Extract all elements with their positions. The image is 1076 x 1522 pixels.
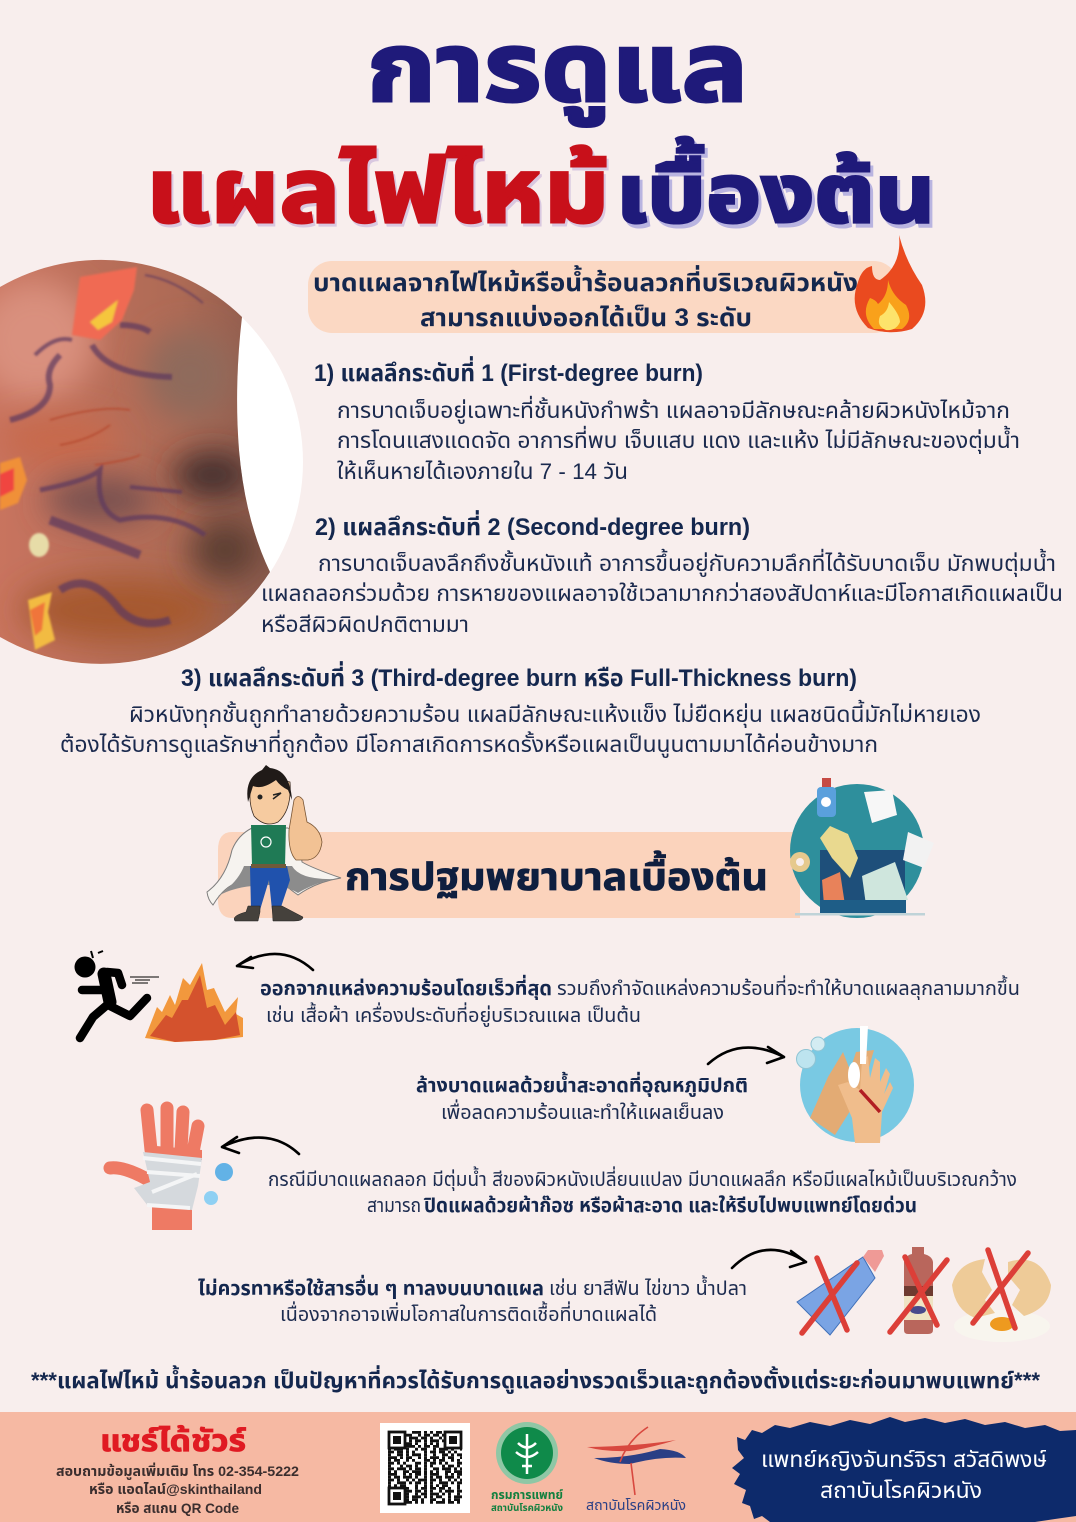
section 1: first-degree burn: ให้เห็นหายได้เองภายใน 7 - 14 วัน — [337, 459, 628, 484]
step 3 text: กรณีมีบาดแผลถลอก มีตุ่มน้ำ สีของผิวหนังเปลี่ยนแปลง มีบาดแผลลึก หรือมีแผลไหม้เป็นบริเวณกว้าง — [268, 1166, 1017, 1191]
step 1 text: เช่น เสื้อผ้า เครื่องประดับที่อยู่บริเวณแผล เป็นต้น — [266, 1002, 641, 1028]
icon: broken egg crossed out — [952, 1250, 1051, 1342]
footer: contact: แชร์ได้ชัวร์ — [100, 1425, 246, 1458]
footer band — [0, 1412, 1076, 1522]
icon: bandaged hand — [110, 1108, 233, 1230]
footer: contact: หรือ แอดไลน์@skinthailand — [89, 1481, 262, 1497]
icon: person running from fire — [74, 951, 159, 1038]
arrow: to washing — [708, 1047, 784, 1064]
arrow: to hand — [222, 1137, 299, 1154]
section 2: second-degree burn: หรือสีผิวผิดปกติตามมา — [261, 612, 469, 637]
step 2 text: เพื่อลดความร้อนและทำให้แผลเย็นลง — [441, 1099, 724, 1124]
step 1 text — [260, 974, 1020, 1028]
title line 2: เบื้องต้น — [616, 136, 935, 240]
logo: Department of Medical Services: กรมการแพทย์ — [491, 1488, 563, 1502]
arrow: to forbidden items — [732, 1250, 806, 1268]
title line 2 — [146, 136, 938, 245]
section 2: second-degree burn: การบาดเจ็บลงลึกถึงชั้นหนังแท้ อาการขึ้นอยู่กับความลึกที่ได้รับบาดเจ็บ มักพบตุ่มน้ำ — [318, 548, 1056, 577]
step 1 text: ออกจากแหล่งความร้อนโดยเร็วที่สุด — [260, 974, 552, 1000]
step 3 text: สามารถ — [367, 1195, 421, 1217]
subtitle pill: บาดแผลจากไฟไหม้หรือน้ำร้อนลวกที่บริเวณผิวหนัง — [313, 265, 858, 297]
subtitle pill — [308, 261, 898, 333]
title line 2: แผลไฟไหม้ — [146, 142, 609, 242]
section 2: second-degree burn: แผลถลอกร่วมด้วย การหายของแผลอาจใช้เวลามากกว่าสองสัปดาห์และมีโอกาสเกิดแผลเป็น — [261, 581, 1063, 606]
first aid banner — [218, 832, 800, 918]
icon: doctor mascot — [207, 765, 341, 921]
doctor name on navy brush: สถาบันโรคผิวหนัง — [820, 1478, 982, 1503]
step 4 text: เนื่องจากอาจเพิ่มโอกาสในการติดเชื้อที่บาดแผลได้ — [280, 1301, 657, 1326]
doctor name on navy brush — [732, 1417, 1076, 1522]
footer: contact: หรือ สแกน QR Code — [116, 1500, 239, 1516]
section 2: second-degree burn: 2) แผลลึกระดับที่ 2 (Second-degree burn) — [315, 510, 750, 541]
section 3: third-degree burn — [60, 661, 981, 758]
logo: Department of Medical Services — [491, 1422, 564, 1514]
doctor name on navy brush: แพทย์หญิงจันทร์จิรา สวัสดิพงษ์ — [761, 1447, 1047, 1472]
title line 2: เบื้องต้น — [619, 140, 938, 244]
section 1: first-degree burn: การบาดเจ็บอยู่เฉพาะที่ชั้นหนังกำพร้า แผลอาจมีลักษณะคล้ายผิวหนังไหม้จาก — [337, 395, 1010, 424]
icon: washing hands — [796, 1026, 914, 1143]
step 3 text: ปิดแผลด้วยผ้าก๊อซ หรือผ้าสะอาด และให้รีบไปพบแพทย์โดยด่วน — [423, 1195, 917, 1217]
step 2 text — [416, 1071, 748, 1124]
logo: Institute of Dermatology — [586, 1427, 686, 1513]
QR code — [380, 1423, 470, 1513]
footer: contact: สอบถามข้อมูลเพิ่มเติม โทร 02-354-5222 — [56, 1462, 299, 1481]
icon: fish sauce bottle crossed out — [890, 1247, 947, 1334]
icon: toothpaste crossed out — [797, 1250, 884, 1335]
logo: Institute of Dermatology: สถาบันโรคผิวหนัง — [586, 1497, 686, 1513]
subtitle pill: สามารถแบ่งออกได้เป็น 3 ระดับ — [420, 304, 752, 332]
section 3: third-degree burn: ต้องได้รับการดูแลรักษาที่ถูกต้อง มีโอกาสเกิดการหดรั้งหรือแผลเป็นนูนตามมาได้ค่อนข้างมาก — [60, 729, 878, 758]
section 3: third-degree burn: ผิวหนังทุกชั้นถูกทำลายด้วยความร้อน แผลมีลักษณะแห้งแข็ง ไม่ยืดหยุ่น แผลชนิดนี้มักไม่หายเอง — [129, 699, 981, 728]
section 2: second-degree burn — [261, 510, 1063, 637]
icon: first aid kit — [790, 778, 934, 918]
arrow: to fire — [237, 954, 313, 970]
logo: Department of Medical Services: สถาบันโรคผิวหนัง — [491, 1503, 564, 1514]
title line 1: การดูแล — [367, 15, 748, 126]
step 2 text: ล้างบาดแผลด้วยน้ำสะอาดที่อุณหภูมิปกติ — [416, 1071, 748, 1097]
step 4 text — [198, 1274, 747, 1326]
section 1: first-degree burn: การโดนแสงแดดจัด อาการที่พบ เจ็บแสบ แดง และแห้ง ไม่มีลักษณะของตุ่มน้ำ — [337, 425, 1020, 454]
step 4 text: ไม่ควรทาหรือใช้สารอื่น ๆ ทาลงบนบาดแผล — [198, 1274, 544, 1300]
icon: flame — [855, 235, 925, 332]
section 1: first-degree burn: 1) แผลลึกระดับที่ 1 (First-degree burn) — [314, 356, 703, 387]
footer: contact — [56, 1425, 299, 1516]
section 3: third-degree burn: 3) แผลลึกระดับที่ 3 (Third-degree burn หรือ Full-Thickness burn) — [181, 661, 857, 692]
icon: fire — [145, 963, 243, 1042]
step 1 text: รวมถึงกำจัดแหล่งความร้อนที่จะทำให้บาดแผลลุกลามมากขึ้น — [557, 975, 1020, 1000]
first aid banner: การปฐมพยาบาลเบื้องต้น — [345, 850, 768, 899]
burn wound photo — [0, 250, 305, 670]
title line 2: แผลไฟไหม้ — [148, 145, 611, 245]
section 1: first-degree burn — [314, 356, 1020, 484]
step 3 text — [268, 1166, 1017, 1217]
warning note: ***แผลไฟไหม้ น้ำร้อนลวก เป็นปัญหาที่ควรได้รับการดูแลอย่างรวดเร็วและถูกต้องตั้งแต่ระยะก่อนมาพบแพทย์*** — [31, 1365, 1040, 1394]
step 4 text: เช่น ยาสีฟัน ไข่ขาว น้ำปลา — [549, 1275, 747, 1300]
